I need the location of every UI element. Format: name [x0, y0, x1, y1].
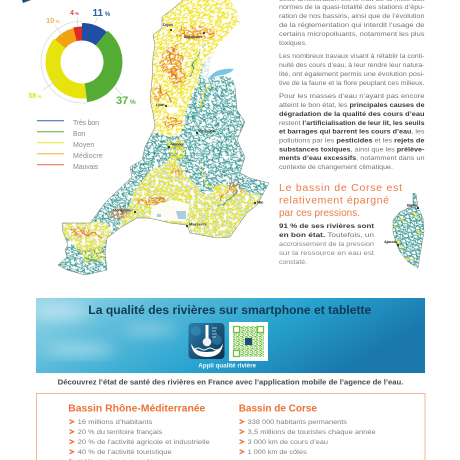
block: Bassin Rhône-Méditerranée: 20 % du territoire français — [78, 429, 163, 436]
text: restoration paragraph: Les nombreux travaux visant à rétablir la conti- — [279, 53, 424, 60]
text: restoration paragraph: tive de la faune et la flore peuplant ces milieux. — [279, 80, 425, 87]
text: restoration paragraph: nuité des cours d’eau, à leur rendre leur natura- — [279, 62, 424, 69]
text: causes paragraph: ments d’eau excessifs , notamment dans un — [279, 155, 425, 162]
city labels: Dijon — [163, 22, 174, 27]
map: river basin — [58, 0, 270, 276]
city labels: Montpellier — [113, 208, 133, 212]
text: Corse paragraph: en bon état. Toutefois, un — [279, 232, 375, 239]
heading: Corse: par ces pressions. — [279, 207, 360, 219]
donut value labels: 10 % — [46, 16, 60, 25]
city labels: Grenoble — [199, 128, 217, 134]
text: restoration paragraph — [279, 53, 425, 87]
text: Corse paragraph: sur la ressource en eau est — [279, 250, 374, 257]
text: causes paragraph: restent l’artificialisation de leur lit, les seuils — [279, 120, 425, 127]
donut value labels: 38 % — [28, 91, 42, 100]
legend: Très bon — [73, 120, 99, 127]
donut value labels: 11 % — [92, 8, 111, 19]
text: intro paragraph: ration de nos bassins, ainsi que de l’évolution — [279, 13, 425, 20]
text: Corse paragraph: accroissement de la pression — [279, 241, 375, 248]
donut value labels — [28, 8, 136, 107]
block: Bassin Rhône-Méditerranée: 20 % de l’activité agricole et industrielle — [78, 439, 210, 446]
text: causes paragraph: atteint le bon état, les principales causes de — [279, 102, 425, 109]
heading: Corse: relativement épargné — [279, 194, 389, 206]
text: intro paragraph: toxiques. — [279, 40, 307, 47]
segment: médiocre 10% — [55, 28, 77, 48]
legend: Bon — [73, 131, 85, 138]
QR code — [229, 322, 268, 361]
donut value labels: 4 % — [70, 10, 79, 17]
map: Corsica — [384, 192, 424, 268]
heading: Corse: Le bassin de Corse est — [279, 182, 402, 194]
text: causes paragraph: et barrages qui barrent les cours d’eau , les — [279, 128, 425, 135]
app label: Appli qualité rivière — [198, 363, 257, 370]
segment: moyen 38% — [46, 39, 87, 98]
donut value labels: 37 % — [116, 95, 136, 107]
segment: très bon 11% — [82, 23, 107, 45]
segment: bon 37% — [85, 31, 122, 102]
city labels — [113, 22, 264, 227]
corner mark — [22, 0, 31, 3]
banner — [34, 298, 425, 373]
text: causes paragraph: pollutions par les pesticides et les rejets de — [279, 137, 425, 144]
icon: app thermometer — [188, 323, 224, 359]
block: Bassin de Corse: 3 000 km de cours d’eau — [248, 439, 328, 446]
segment: mauvais 4% — [73, 26, 82, 41]
text: causes paragraph: Pour les masses d’eau n’ayant pas encore — [279, 93, 425, 100]
block: Bassin de Corse — [239, 403, 376, 456]
block: Bassin de Corse: Bassin de Corse — [239, 403, 317, 415]
city labels: Valence — [171, 142, 185, 146]
text: intro paragraph: certains micropolluants, notamment les plus — [279, 31, 424, 38]
city labels: Marseille — [189, 222, 208, 226]
block: Bassin Rhône-Méditerranée: 40 % de l’activité touristique — [78, 449, 172, 456]
block: Bassin Rhône-Méditerranée — [68, 403, 210, 460]
legend: Moyen — [73, 142, 94, 149]
text: causes paragraph: substances toxiques , ainsi que les prélève- — [279, 146, 424, 153]
text: Corse paragraph: 91 % de ses rivières sont — [279, 223, 375, 230]
text: intro paragraph: de la réglementation qui interdit l’usage de — [279, 22, 425, 29]
banner title: La qualité des rivières sur smartphone et tablette — [88, 305, 371, 317]
block: Bassin Rhône-Méditerranée: Bassin Rhône-Méditerranée — [68, 403, 205, 415]
city labels: Nice — [257, 200, 264, 204]
text: causes paragraph: contexte de changement climatique. — [279, 164, 393, 171]
text: Corse paragraph: constaté. — [279, 259, 307, 266]
map: Corsica: Ajaccio — [384, 239, 398, 244]
caption: Découvrez l’état de santé des rivières en France avec l’application mobile de l’agence de l’eau. — [58, 380, 403, 387]
ponds — [157, 211, 186, 219]
text: causes paragraph — [279, 93, 425, 171]
legend: Médiocre — [73, 153, 103, 160]
panel: key figures — [36, 394, 425, 460]
heading: Corse — [279, 182, 402, 219]
donut chart — [41, 17, 122, 103]
city labels: Lyon — [156, 102, 165, 107]
city labels: Besançon — [184, 34, 203, 39]
lake: Léman — [208, 69, 234, 80]
block: Bassin Rhône-Méditerranée: 16 millions d’habitants — [78, 419, 153, 426]
legend: Mauvais — [73, 164, 99, 171]
text: restoration paragraph: lité, ont également permis une évolution posi- — [279, 71, 424, 78]
text: causes paragraph: dégradation de la qualité des cours d’eau — [279, 111, 425, 118]
legend — [37, 120, 103, 171]
block: Bassin de Corse: 3,5 millions de touristes chaque année — [248, 429, 376, 436]
text: Corse paragraph — [279, 223, 375, 266]
block: Bassin de Corse: 1 000 km de côtes — [248, 449, 307, 456]
block: Bassin de Corse: 338 000 habitants permanents — [248, 419, 348, 426]
text: intro paragraph: normes de la quasi-totalité des stations d’épu- — [279, 4, 424, 11]
text: intro paragraph — [279, 0, 425, 47]
map: Corsica: Bastia — [407, 202, 418, 208]
